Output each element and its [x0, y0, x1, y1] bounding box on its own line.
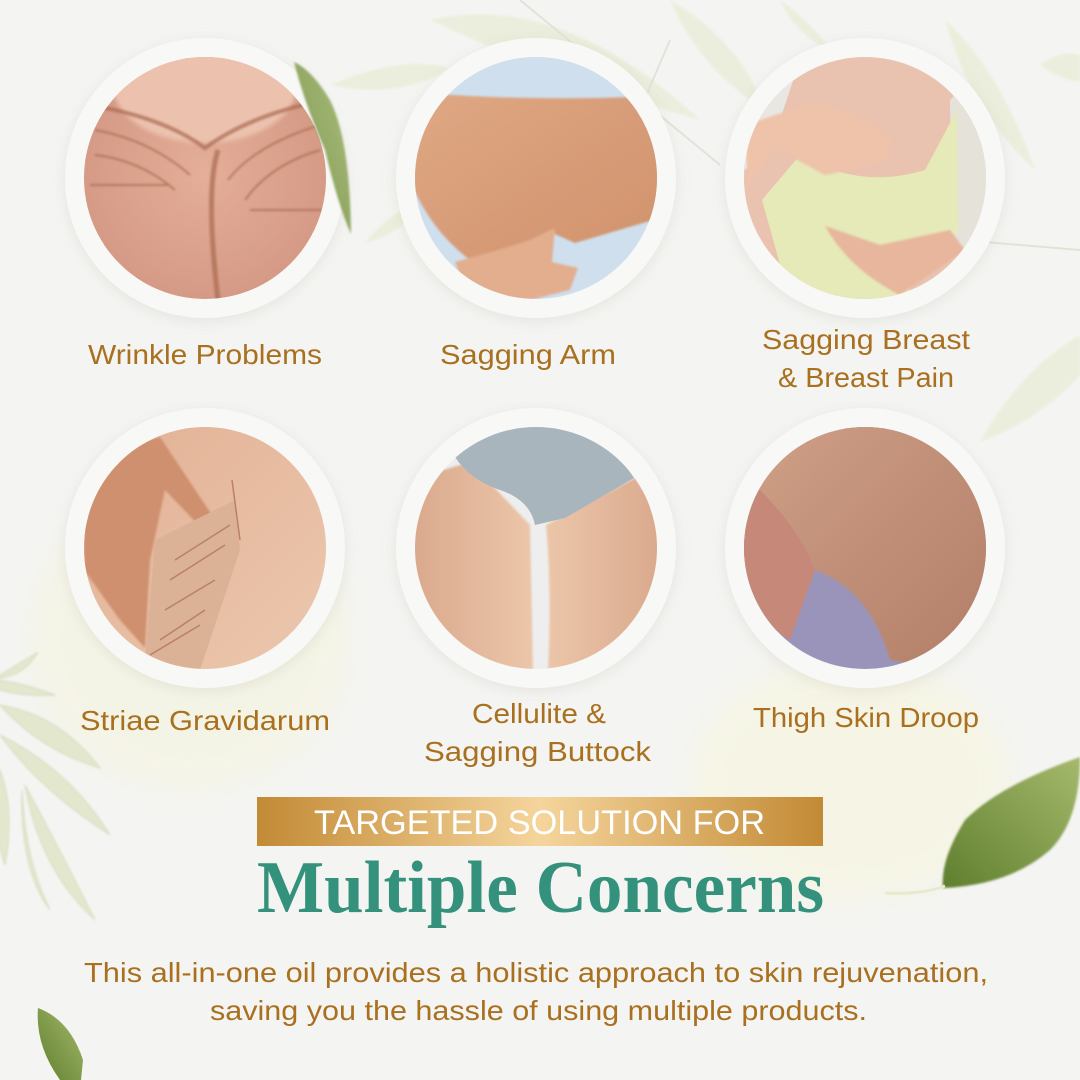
description: This all-in-one oil provides a holistic approach to skin rejuvenation,	[84, 957, 988, 988]
leaf: top left over ring	[294, 62, 351, 234]
label: cellulite	[424, 698, 652, 767]
photo card: arm	[396, 38, 676, 318]
description	[84, 957, 988, 1026]
photo card: thigh	[725, 408, 1005, 688]
heading: Multiple Concerns	[257, 847, 824, 929]
banner	[257, 797, 823, 846]
label: striae: Striae Gravidarum	[80, 705, 330, 736]
label: cellulite: Sagging Buttock	[424, 736, 652, 767]
label: breast	[762, 324, 970, 393]
photo card: buttock	[396, 408, 676, 688]
photo card: breast	[725, 38, 1005, 318]
label: cellulite: Cellulite &	[472, 698, 606, 729]
leaf: right	[885, 757, 1080, 893]
leaves: left branch	[0, 652, 110, 920]
label: arm: Sagging Arm	[440, 339, 616, 370]
photo card: stretch marks	[65, 408, 345, 688]
leaf: bottom	[38, 1008, 83, 1080]
label: wrinkle: Wrinkle Problems	[88, 339, 322, 370]
banner: TARGETED SOLUTION FOR	[314, 804, 765, 842]
description: saving you the hassle of using multiple products.	[210, 995, 867, 1026]
label: breast: & Breast Pain	[778, 362, 954, 393]
photo card: wrinkle	[65, 27, 345, 318]
label: thigh: Thigh Skin Droop	[753, 702, 979, 733]
label: breast: Sagging Breast	[762, 324, 970, 355]
